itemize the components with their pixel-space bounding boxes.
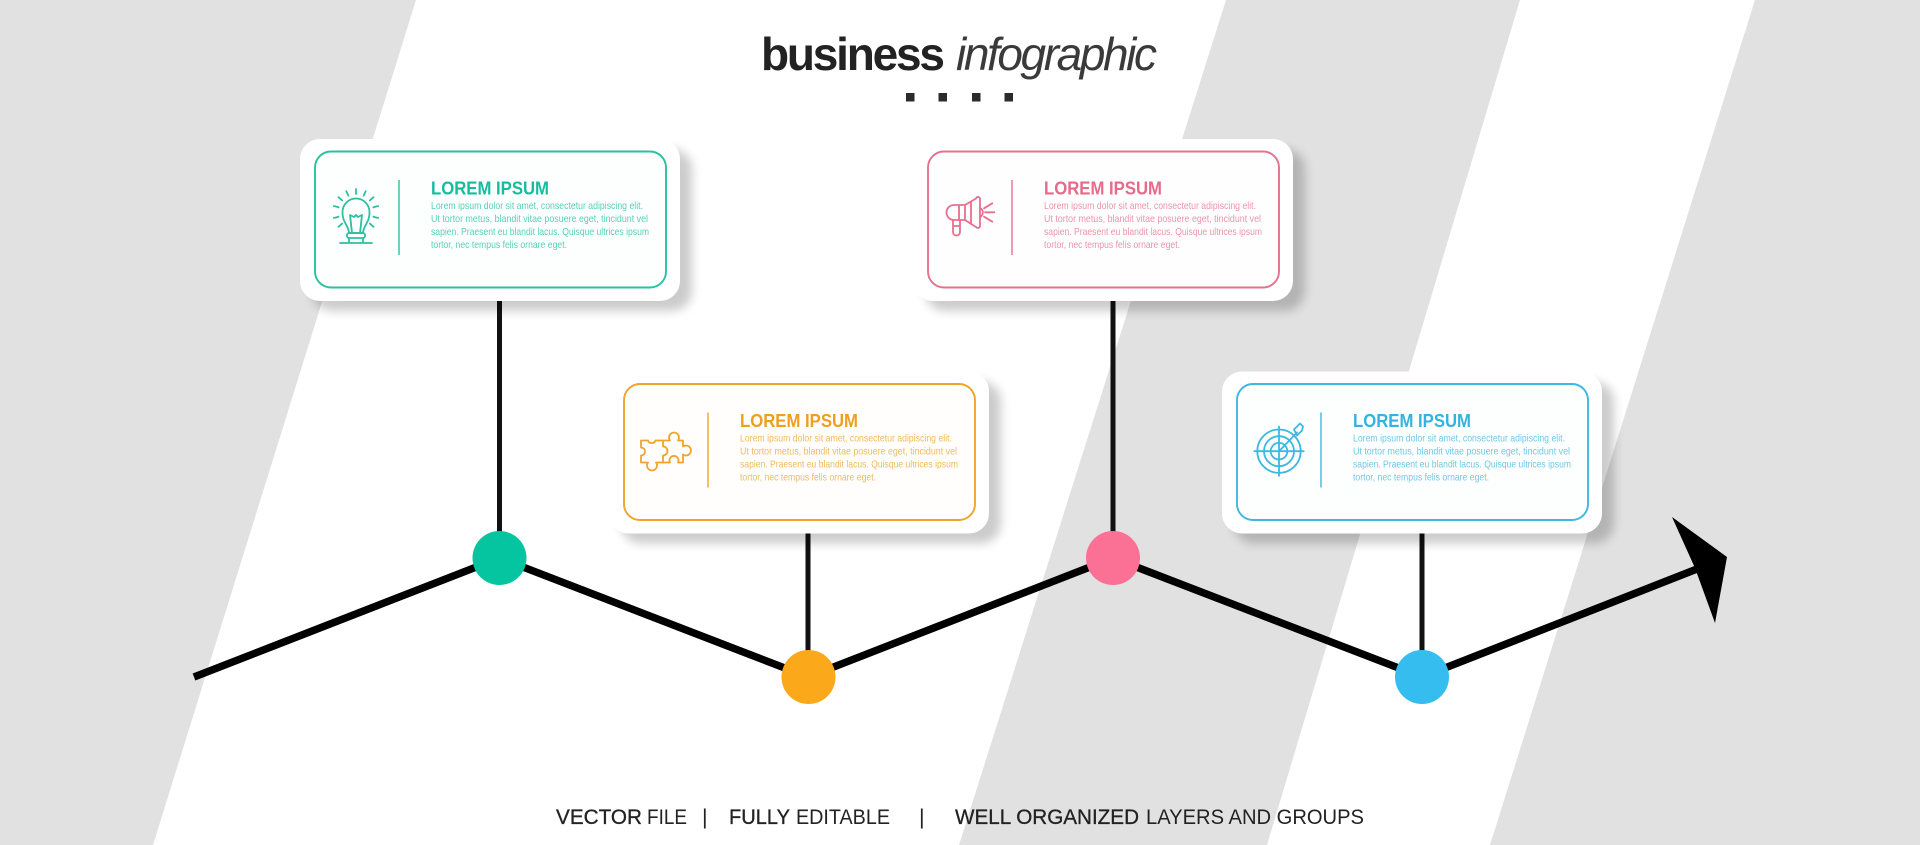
connector lines [497,300,1424,663]
panel: card 3 pink [913,139,1305,311]
icon: light bulb [334,189,378,243]
icon: megaphone [946,197,994,236]
node: orange [782,650,836,704]
text block: card 1 [431,200,649,251]
icon: target [1254,424,1304,476]
text block: card 2: Lorem ipsum dolor sit amet, consectetur adipiscing elit. [740,432,952,444]
text block: card 3: sapien. Praesent eu blandit lacus. Quisque ultrices ipsum [1044,226,1262,238]
text block: card 3: Ut tortor metus, blandit vitae posuere eget, tincidunt vel [1044,213,1261,225]
heading: card 1: LOREM IPSUM [431,178,549,198]
footer text: | [919,805,925,829]
text block: card 4: Lorem ipsum dolor sit amet, consectetur adipiscing elit. [1353,432,1565,444]
footer text [556,805,1364,829]
title [761,28,1157,80]
text block: card 3: Lorem ipsum dolor sit amet, consectetur adipiscing elit. [1044,200,1256,212]
title: business [761,28,945,80]
icon: puzzle [641,432,691,470]
text block: card 4 [1353,432,1571,484]
title dots [906,93,1013,102]
footer text: FILE [647,805,687,829]
text block: card 2: sapien. Praesent eu blandit lacus. Quisque ultrices ipsum [740,458,958,470]
text block: card 2 [740,432,958,484]
footer text: EDITABLE [796,805,890,829]
text block: card 2: Ut tortor metus, blandit vitae posuere eget, tincidunt vel [740,446,957,458]
footer text: | [702,805,708,829]
heading: card 3: LOREM IPSUM [1044,178,1162,198]
node: teal [472,531,526,585]
text block: card 1: sapien. Praesent eu blandit lacus. Quisque ultrices ipsum [431,226,649,238]
text block: card 2: tortor, nec tempus felis ornare eget. [740,472,876,484]
panel: card 2 orange [609,372,1001,544]
text block: card 4: Ut tortor metus, blandit vitae posuere eget, tincidunt vel [1353,446,1570,458]
heading: card 4: LOREM IPSUM [1353,411,1471,431]
node: blue [1395,650,1449,704]
heading: card 2: LOREM IPSUM [740,411,858,431]
panel: card 4 blue [1222,372,1614,544]
text block: card 4: tortor, nec tempus felis ornare eget. [1353,472,1489,484]
footer text: VECTOR [556,805,642,829]
panel: card 1 teal [300,139,692,311]
footer text: WELL ORGANIZED [955,805,1139,829]
text block: card 3 [1044,200,1262,251]
text block: card 3: tortor, nec tempus felis ornare eget. [1044,239,1180,251]
text block: card 1: Ut tortor metus, blandit vitae posuere eget, tincidunt vel [431,213,648,225]
footer text: LAYERS AND GROUPS [1146,805,1364,829]
node: pink [1086,531,1140,585]
text block: card 4: sapien. Praesent eu blandit lacus. Quisque ultrices ipsum [1353,458,1571,470]
title: infographic [956,28,1157,80]
footer text: FULLY [729,805,790,829]
text block: card 1: tortor, nec tempus felis ornare eget. [431,239,567,251]
text block: card 1: Lorem ipsum dolor sit amet, consectetur adipiscing elit. [431,200,643,212]
timeline arrow line [194,517,1727,677]
